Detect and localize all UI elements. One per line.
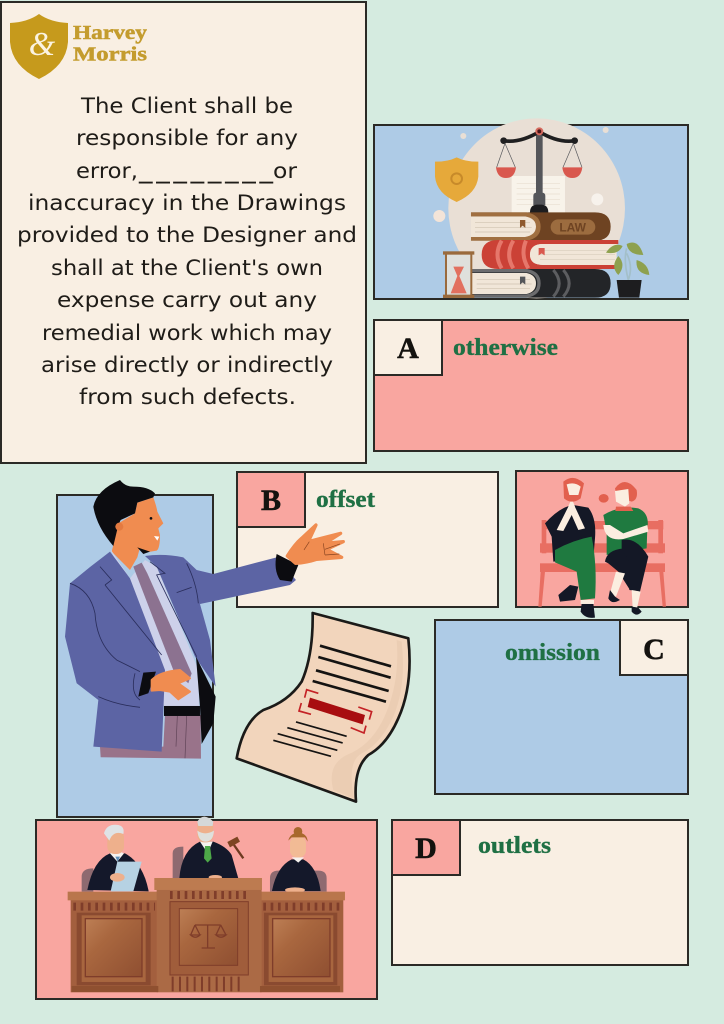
panel: option A xyxy=(374,320,688,451)
illustration: contract document xyxy=(237,613,410,802)
letter box B: B xyxy=(261,484,281,517)
courtroom desk xyxy=(68,878,345,992)
paper xyxy=(512,176,565,213)
answer A: otherwise xyxy=(453,335,558,361)
question text: remedial work which may xyxy=(42,321,332,345)
question text: error, xyxy=(76,159,138,183)
logo: Harvey Morris xyxy=(10,14,147,79)
question text: ________ xyxy=(138,153,274,184)
panel: bench illustration xyxy=(516,471,688,618)
background circle xyxy=(448,118,625,298)
panel: man background xyxy=(57,495,213,817)
question text: provided to the Designer and xyxy=(17,223,357,247)
book: law xyxy=(471,212,611,241)
left judge xyxy=(87,825,149,891)
right judge xyxy=(272,827,321,893)
icon: desk scales xyxy=(191,925,226,948)
answer D: outlets xyxy=(478,833,551,859)
question text: The Client shall be xyxy=(80,94,293,118)
panel: law illustration xyxy=(374,118,688,299)
question text: expense carry out any xyxy=(57,288,317,312)
panel: option D xyxy=(392,820,688,965)
panel: option C xyxy=(435,620,688,794)
letter box B xyxy=(237,472,305,527)
jacket body xyxy=(65,552,165,752)
icon: hourglass xyxy=(443,251,474,298)
icon: plant xyxy=(606,243,649,298)
bench xyxy=(538,520,666,607)
icon: shield xyxy=(435,157,478,202)
letter box A: A xyxy=(397,332,419,365)
question text: inaccuracy in the Drawings xyxy=(28,191,346,215)
answer B: offset xyxy=(316,487,375,513)
woman on bench xyxy=(599,482,648,615)
panel: court illustration xyxy=(36,817,377,999)
question text: arise directly or indirectly xyxy=(41,353,333,377)
book: red xyxy=(482,240,618,269)
letter box C: C xyxy=(643,633,665,666)
icon: scales xyxy=(496,127,582,213)
neck and face xyxy=(112,497,163,570)
question text: from such defects. xyxy=(79,385,296,409)
book: law: LAW xyxy=(559,220,587,234)
cuffs xyxy=(276,554,298,582)
trousers xyxy=(100,715,201,759)
illustration: presenter man xyxy=(65,480,343,759)
centre judge xyxy=(179,817,243,880)
chairs xyxy=(82,847,327,892)
shirt xyxy=(110,548,199,707)
question text: or xyxy=(273,159,297,183)
letter box D: D xyxy=(415,832,437,865)
man on bench xyxy=(545,478,596,618)
logo: Harvey Morris: Harvey xyxy=(73,22,147,44)
lower hand xyxy=(152,670,190,699)
jacket right side and arm xyxy=(145,555,296,687)
panel: option B xyxy=(237,472,498,607)
hair xyxy=(93,480,155,546)
question text: shall at the Client's own xyxy=(51,256,323,280)
letter box D xyxy=(392,820,460,875)
answer C: omission xyxy=(505,640,600,666)
letter box A xyxy=(374,320,442,375)
pointing hand xyxy=(287,525,343,563)
book: black xyxy=(471,269,611,298)
panel: question xyxy=(1,2,366,463)
tie xyxy=(133,563,192,683)
black lining and belt xyxy=(196,657,216,744)
logo: Harvey Morris: & xyxy=(29,26,56,63)
letter box C xyxy=(620,620,688,675)
question text: responsible for any xyxy=(76,126,298,150)
jacket lines xyxy=(70,562,198,707)
question text xyxy=(17,94,357,409)
logo: Harvey Morris: Morris xyxy=(73,44,147,66)
